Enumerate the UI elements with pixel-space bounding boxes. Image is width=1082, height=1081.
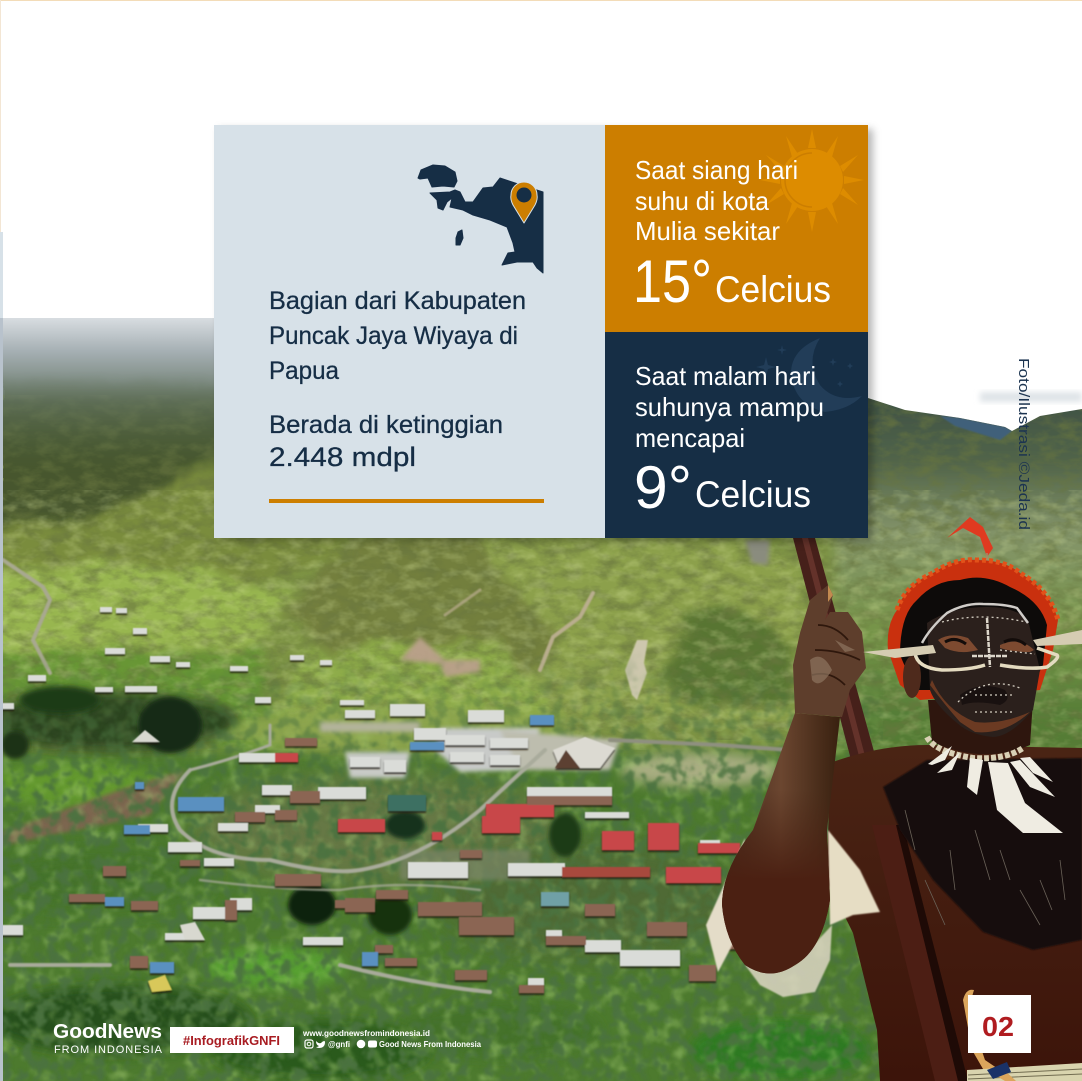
distant blue ridge [940, 416, 1012, 440]
torso [827, 745, 1082, 1081]
text: 15 degrees Celcius: 15° [633, 248, 712, 315]
text: location description: Bagian dari Kabupaten [269, 287, 526, 315]
text: 9 degrees Celcius [634, 454, 811, 521]
panel: location [214, 125, 605, 538]
text: daytime description: Saat siang hari [635, 155, 798, 185]
page number [968, 995, 1031, 1053]
footer logo: GoodNews From Indonesia [53, 1021, 163, 1056]
text: daytime description: Mulia sekitar [635, 216, 780, 246]
ear [903, 656, 921, 698]
boar tusk [963, 990, 1016, 1081]
red feather [947, 517, 993, 557]
man in traditional Dani dress [706, 517, 1082, 1081]
text: location description [269, 287, 526, 472]
footer social links: @gnfi [328, 1039, 350, 1049]
panel: nighttime temperature [605, 332, 868, 538]
valley floor vegetation [3, 660, 880, 1081]
icon: map of Papua with pin [418, 165, 543, 273]
hashtag badge: #InfografikGNFI [183, 1033, 280, 1048]
text: daytime description: suhu di kota [635, 186, 770, 216]
white headband [922, 604, 1028, 643]
text: 9 degrees Celcius: 9° [634, 454, 692, 521]
icon: twitter [316, 1041, 325, 1048]
nose and face paint [972, 618, 1008, 667]
rock and soil streaks [3, 560, 593, 673]
landscape photo: valley with village [0, 318, 1082, 1081]
green slopes [3, 380, 1082, 762]
photo credit: Foto/Ilustrasi ©Jeda.id [1015, 358, 1032, 530]
village roads [10, 725, 790, 992]
panel: daytime temperature [605, 125, 868, 332]
footer social links [302, 1028, 481, 1049]
text: 9 degrees Celcius: Celcius [695, 474, 811, 515]
text: nighttime description: mencapai [635, 423, 745, 453]
nose ring and quills [915, 648, 1058, 670]
arm and hand [722, 585, 866, 974]
text: location description: Berada di ketinggian [269, 411, 503, 439]
icon: sun [760, 129, 864, 232]
text: location description: Puncak Jaya Wiyaya di [269, 322, 518, 350]
text: nighttime description [635, 361, 824, 453]
tooth pendants [928, 746, 1063, 833]
village houses [0, 607, 750, 993]
icon: crescent moon and stars [756, 338, 862, 412]
hair [900, 578, 1047, 690]
bead necklace [927, 737, 1023, 758]
town centre pale ground [320, 722, 620, 880]
information card [214, 125, 868, 538]
feather headdress [888, 560, 1058, 700]
face [927, 607, 1040, 737]
fur armband [706, 830, 880, 997]
spear [793, 538, 965, 1081]
text: nighttime description: suhunya mampu [635, 392, 824, 422]
text: daytime description [635, 155, 798, 246]
footer social links: www.goodnewsfromindonesia.id [302, 1028, 430, 1038]
footer logo: GoodNews From Indonesia: FROM INDONESIA [54, 1044, 163, 1056]
page number: 02 [982, 1011, 1014, 1042]
text: 15 degrees Celcius: Celcius [715, 269, 831, 310]
footer logo: GoodNews From Indonesia: GoodNews [53, 1021, 162, 1043]
text: location description: Papua [269, 357, 339, 385]
text: location description: 2.448 mdpl [269, 442, 416, 472]
text: nighttime description: Saat malam hari [635, 361, 816, 391]
icon: instagram [305, 1040, 313, 1048]
icon: facebook [357, 1040, 365, 1048]
head [863, 517, 1082, 754]
neck [928, 700, 1033, 754]
spear in front of torso [872, 825, 968, 1081]
text: 15 degrees Celcius [633, 248, 831, 315]
hazy mountains and sky [3, 318, 1082, 488]
hashtag badge [170, 1027, 294, 1053]
footer social links: Good News From Indonesia [379, 1039, 481, 1049]
black fur cape [883, 758, 1082, 950]
icon: youtube [368, 1040, 377, 1048]
woven waistband [967, 1062, 1082, 1081]
